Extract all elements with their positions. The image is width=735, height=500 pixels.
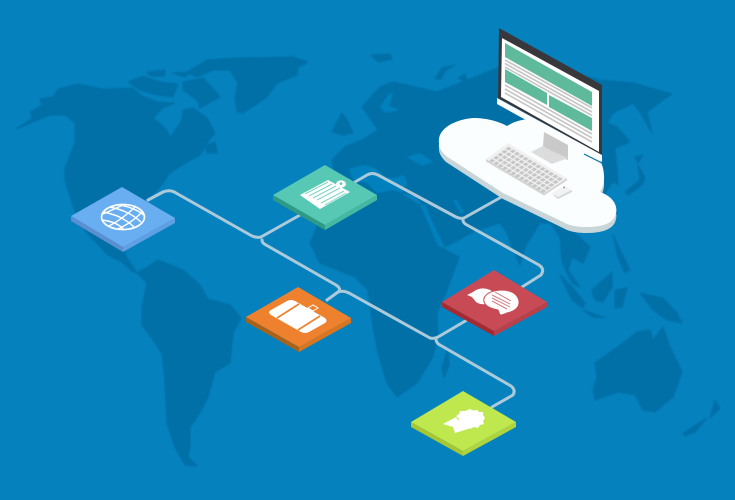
connector: junction to award tile xyxy=(436,339,514,407)
monitor stand xyxy=(531,132,568,164)
islands: Europe, Arctic and Madagascar xyxy=(299,54,468,378)
tile: globe xyxy=(71,187,175,252)
connector: junction to red tile xyxy=(463,220,543,287)
sea: Mediterranean xyxy=(349,165,407,193)
continent: South America xyxy=(137,260,241,466)
network connector lines xyxy=(148,174,543,407)
sea: Red Sea xyxy=(421,205,441,246)
island: Greenland xyxy=(187,57,308,113)
icon: clipboard xyxy=(300,180,350,209)
keyboard xyxy=(486,143,567,196)
sea: Persian Gulf xyxy=(453,200,464,213)
monitor screen xyxy=(501,38,599,152)
inland seas xyxy=(349,92,464,246)
islands: East and South-East Asia xyxy=(560,155,645,318)
continent: Eurasia xyxy=(332,65,672,287)
continent: Africa xyxy=(310,170,459,397)
tile: suitcase xyxy=(246,287,351,352)
tile: clipboard xyxy=(273,165,377,230)
connector: clipboard tile to cloud and red tile xyxy=(355,174,505,218)
islands: New Zealand xyxy=(683,400,720,436)
tile: award xyxy=(411,391,516,456)
connector: junction to suitcase tile and red tile xyxy=(262,240,467,338)
sea: Baltic xyxy=(380,92,400,113)
computer monitor xyxy=(497,28,602,164)
continent: North America xyxy=(16,84,215,273)
continent: Australia xyxy=(593,327,682,412)
icon: suitcase xyxy=(269,300,326,333)
islands: New Guinea xyxy=(640,293,682,323)
tile: speech bubbles xyxy=(442,270,547,336)
mouse xyxy=(552,186,572,199)
icon: speech bubbles xyxy=(467,288,519,315)
cloud xyxy=(439,118,616,233)
icon: globe xyxy=(102,204,145,230)
icon: award xyxy=(443,409,485,433)
islands: Canadian Arctic xyxy=(128,70,220,153)
connector: globe tile to clipboard tile xyxy=(148,191,300,237)
world map xyxy=(16,54,720,466)
sea: Black Sea xyxy=(407,153,433,166)
